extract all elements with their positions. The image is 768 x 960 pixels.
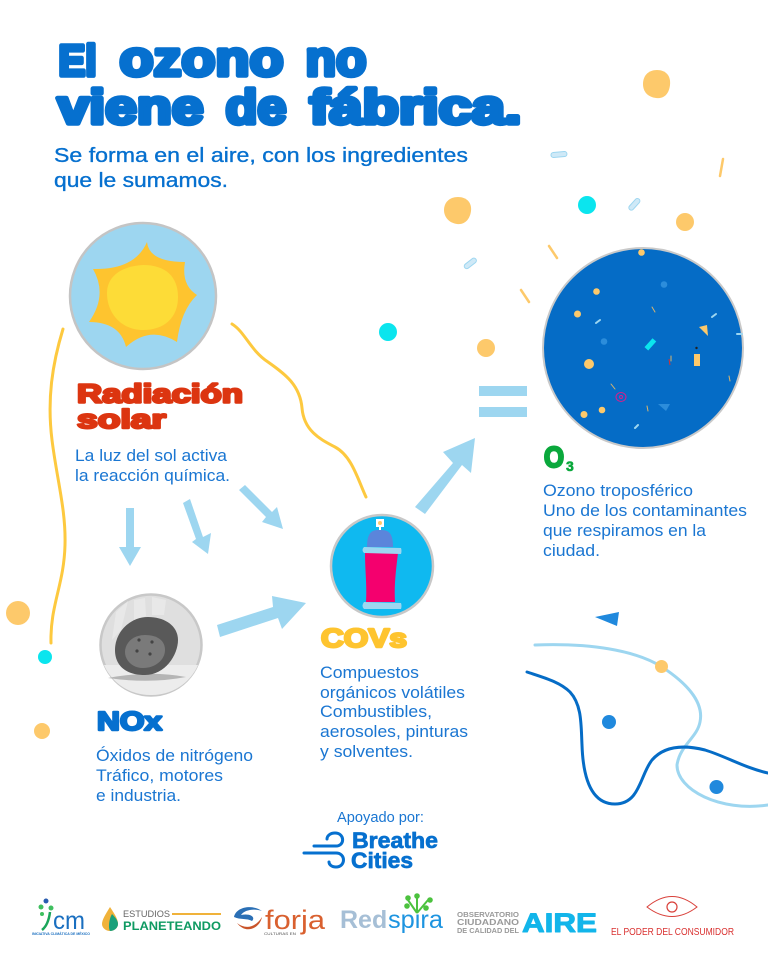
text: NOx description: Tráfico, motores [96, 767, 223, 785]
text: ozone description: Uno de los contaminantes [543, 502, 747, 520]
logo: ICM [32, 898, 90, 936]
decorative confetti [6, 70, 723, 739]
heading: Radiación solar: Radiación [77, 378, 243, 408]
logo: Forja: forja [265, 905, 326, 935]
logo: Redspira: spira [388, 906, 443, 934]
equals sign [479, 386, 527, 417]
icon: tire [100, 594, 202, 696]
icon: spray can [331, 515, 433, 617]
title: de [226, 82, 286, 134]
subtitle: que le sumamos. [54, 169, 228, 192]
logo: Breathe Cities: Breathe [352, 828, 438, 853]
text: ozone description [543, 482, 747, 560]
icon: ozone circle [543, 248, 743, 448]
decorative curves bottom right [527, 612, 768, 806]
heading: O3: 3 [566, 458, 574, 474]
text: COVs description [320, 664, 468, 761]
logo: Observatorio Ciudadano de Calidad del Aire: DE CALIDAD DEL [457, 926, 519, 935]
arrow: NOx to COVs [217, 596, 306, 637]
icon: sun [70, 223, 216, 369]
title: El [58, 36, 96, 86]
logo: Observatorio Ciudadano de Calidad del Aire: OBSERVATORIO [457, 910, 519, 919]
text: NOx description [96, 746, 253, 805]
logo: ICM: INICIATIVA CLIMÁTICA DE MÉXICO [32, 931, 90, 936]
heading: Radiación solar [77, 378, 243, 434]
wavy line: right [232, 324, 366, 497]
arrow: COVs to ozone [415, 438, 475, 514]
text: COVs description: Compuestos [320, 664, 419, 682]
title: fábrica. [310, 82, 522, 134]
heading: COVs: COVs [321, 623, 407, 653]
text: COVs description: y solventes. [320, 743, 413, 761]
text: solar radiation description: La luz del sol activa [75, 447, 228, 465]
arrow: sun to COVs [239, 485, 283, 529]
text: COVs description: orgánicos volátiles [320, 684, 465, 702]
title [58, 32, 522, 134]
logo: Redspira [340, 894, 443, 934]
arrow: sun to NOx 2 [183, 499, 211, 554]
logo: Redspira: Red [340, 906, 387, 934]
logo: El Poder del Consumidor [611, 896, 734, 938]
logo: El Poder del Consumidor: EL PODER DEL CONSUMIDOR [611, 926, 734, 938]
logo: Forja: CULTURAS EN [264, 932, 297, 936]
logo: Estudios Planeteando: ESTUDIOS [123, 909, 170, 920]
logo: Breathe Cities: Cities [351, 848, 413, 873]
subtitle [54, 144, 468, 192]
text: NOx description: Óxidos de nitrógeno [96, 746, 253, 765]
text: NOx description: e industria. [96, 787, 181, 805]
heading: Radiación solar: solar [77, 404, 166, 434]
logo: Observatorio Ciudadano de Calidad del Aire: CIUDADANO [457, 918, 519, 927]
subtitle: Se forma en el aire, con los ingredientes [54, 144, 468, 167]
wavy line: left [50, 329, 65, 643]
text: solar radiation description: la reacción química. [75, 467, 230, 485]
heading: NOx: NOx [97, 706, 163, 736]
title: no [306, 32, 366, 86]
title: ozono [120, 32, 284, 86]
logo: Estudios Planeteando [102, 907, 221, 933]
text: ozone description: Ozono troposférico [543, 482, 693, 500]
text: ozone description: que respiramos en la [543, 522, 707, 540]
logo: Forja [234, 905, 326, 936]
text: solar radiation description [75, 447, 230, 485]
title: viene [58, 82, 204, 134]
logo: ICM: cm [53, 907, 85, 935]
arrow: sun to NOx 1 [119, 508, 141, 566]
heading: O3: O [544, 442, 564, 474]
text: ozone description: ciudad. [543, 542, 600, 560]
logo: Observatorio Ciudadano de Calidad del Aire [457, 908, 597, 938]
text: supported by: Apoyado por: [337, 810, 424, 826]
text: COVs description: aerosoles, pinturas [320, 723, 468, 741]
logo: Breathe Cities [304, 828, 438, 873]
text: COVs description: Combustibles, [320, 703, 432, 721]
logo: Observatorio Ciudadano de Calidad del Aire: AIRE [522, 908, 597, 938]
logo: Estudios Planeteando: PLANETEANDO [123, 919, 221, 933]
